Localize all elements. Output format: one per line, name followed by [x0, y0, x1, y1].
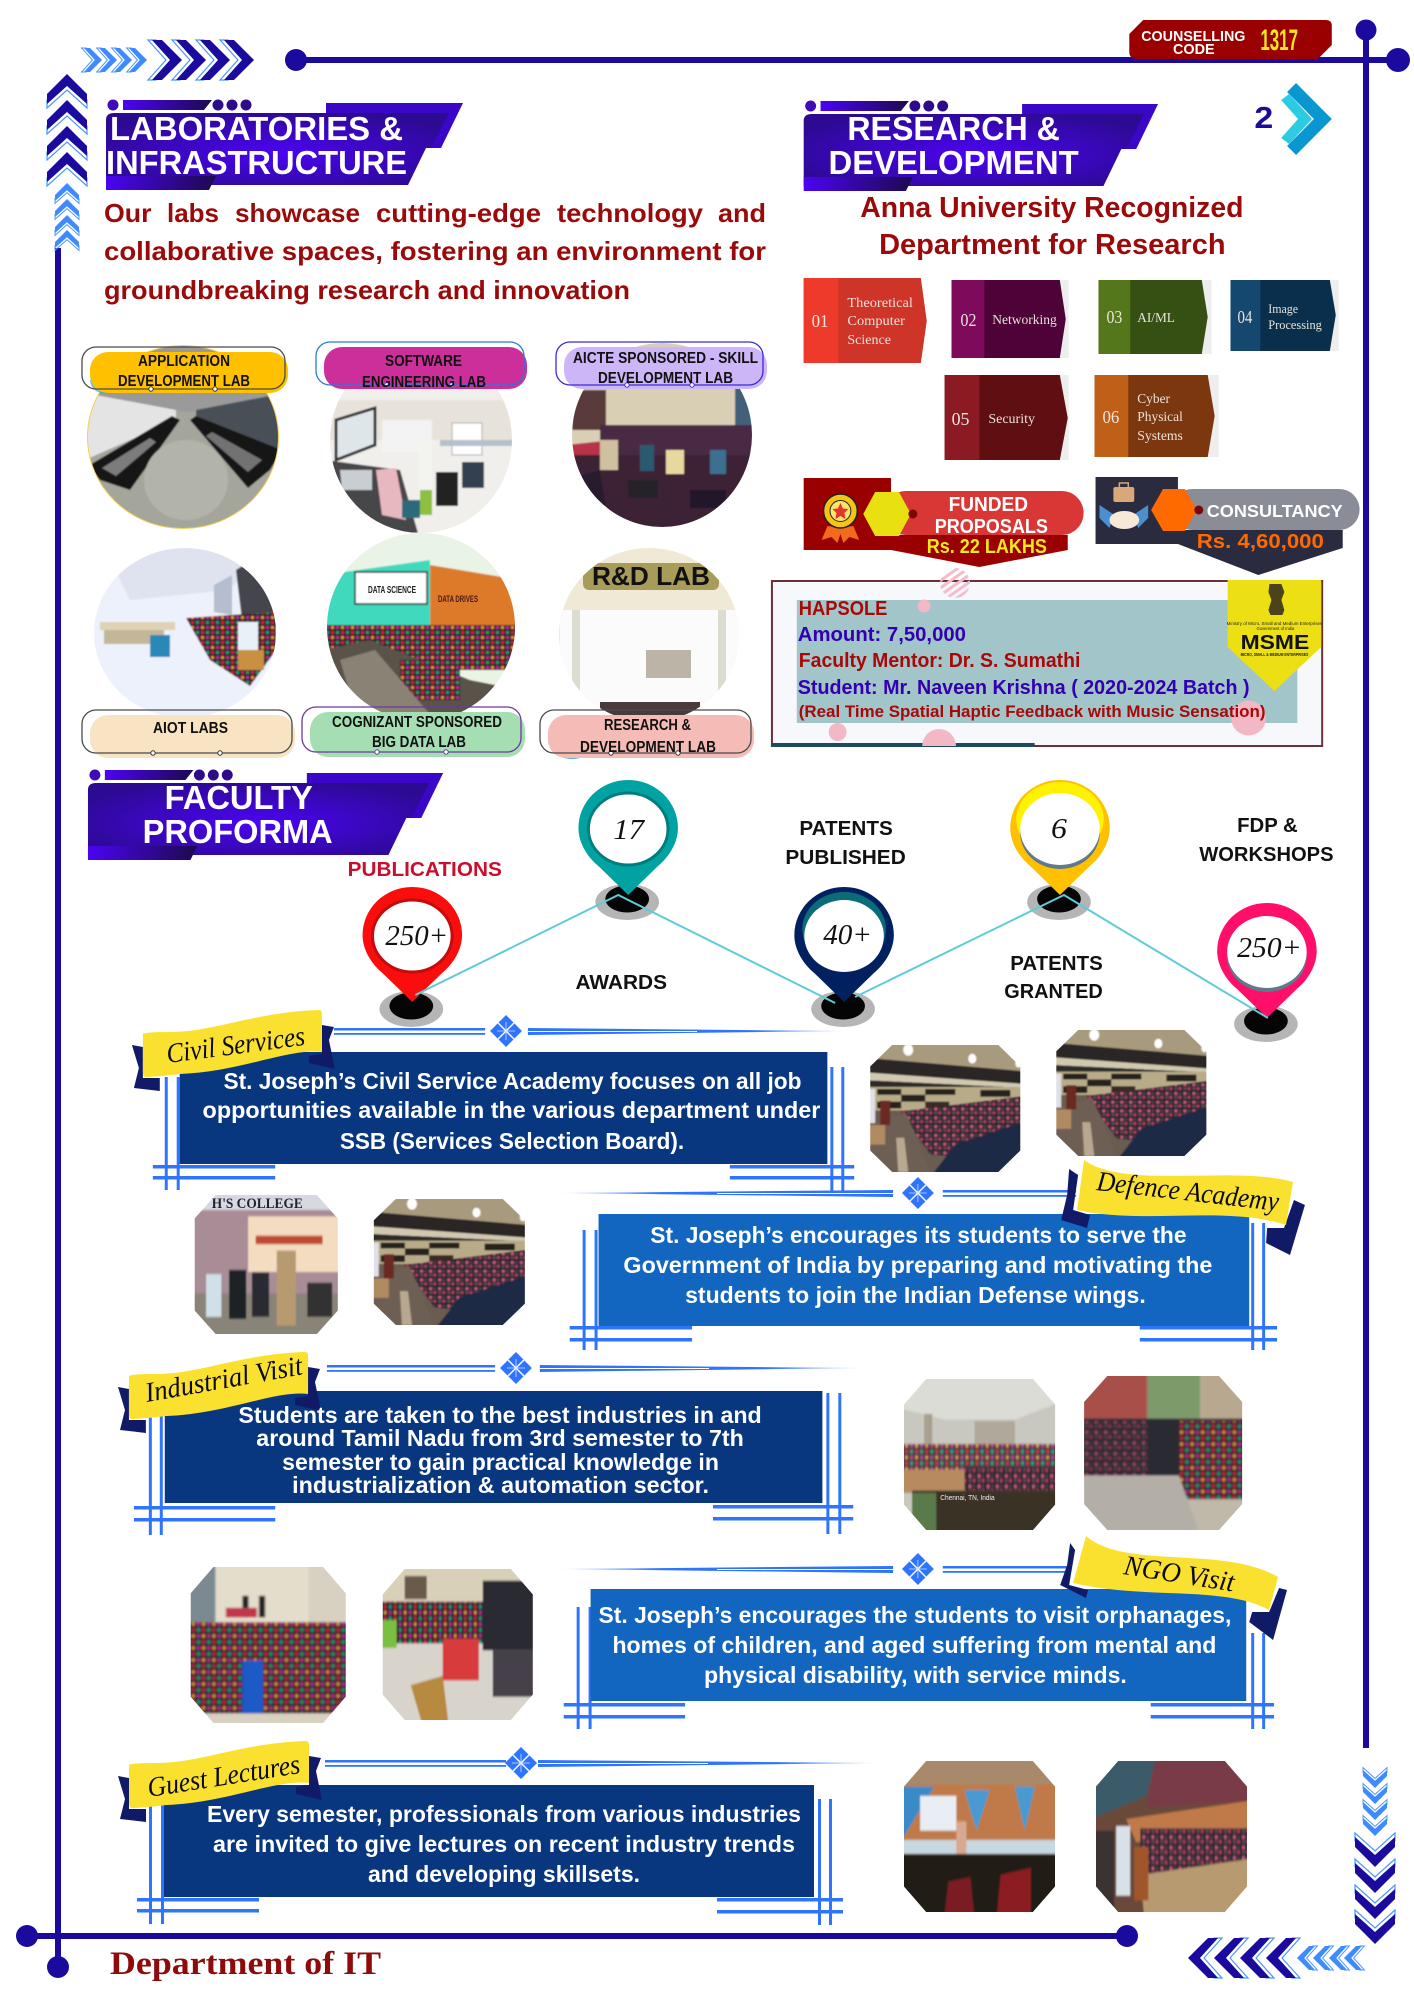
text block: labs intro: groundbreaking research and innovation [104, 275, 630, 305]
panel: civil services: St. Joseph’s Civil Service Academy focuses on all job [223, 1068, 802, 1094]
photo: guest lecture audience [1096, 1761, 1247, 1912]
panel: industrial visit: around Tamil Nadu from 3rd semester to 7th [256, 1425, 744, 1451]
panel: ngo visit: homes of children, and aged suffering from mental and [612, 1632, 1216, 1658]
label: application development lab [82, 347, 288, 394]
research area 03 [1099, 280, 1212, 354]
heading: anna university recognized: Department for Research [879, 229, 1226, 261]
pin: patents published: PATENTS [799, 818, 893, 840]
research area 03: AI/ML [1137, 311, 1175, 326]
research area 05: Security [988, 412, 1035, 427]
heading: research and development [804, 100, 1158, 191]
label: cognizant big data lab [302, 707, 525, 757]
panel: hapsole project: Amount: 7,50,000 [798, 624, 966, 646]
heading: faculty proforma: FACULTY [165, 779, 313, 816]
label: cognizant big data lab: COGNIZANT SPONSORED [332, 714, 502, 731]
counselling code badge: COUNSELLING [1141, 28, 1245, 45]
panel: guest lectures: Guest Lectures [145, 1749, 302, 1804]
text block: labs intro: labs [167, 198, 219, 228]
heading: laboratories and infrastructure [106, 100, 463, 190]
text block: labs intro [104, 198, 766, 305]
research area 02: 02 [961, 310, 976, 330]
research area 03: 03 [1106, 307, 1122, 327]
label: aicte skill development lab: DEVELOPMENT LAB [598, 370, 733, 387]
text block: labs intro: Our [104, 198, 152, 228]
photo: industrial group [1084, 1376, 1242, 1530]
pin: patents granted: PATENTS [1010, 953, 1103, 975]
panel: guest lectures: and developing skillsets. [368, 1861, 640, 1887]
pin: fdp and workshops: WORKSHOPS [1199, 844, 1334, 866]
heading: laboratories and infrastructure: INFRASTRUCTURE [106, 144, 407, 181]
chart: faculty metrics pins [348, 780, 1334, 1042]
panel: industrial visit: Industrial Visit [142, 1350, 306, 1409]
text block: labs intro: showcase [235, 198, 360, 228]
pin: patents published: PUBLISHED [785, 847, 906, 869]
pin: fdp and workshops: 250+ [1237, 933, 1302, 964]
photo: defence hall [374, 1199, 525, 1325]
counselling code badge [1129, 20, 1332, 59]
panel: guest lectures: are invited to give lectures on recent industry trends [213, 1831, 795, 1857]
photo: industrial seminar room [904, 1379, 1056, 1530]
text block: labs intro: cutting-edge [376, 198, 541, 228]
text block: labs intro: technology [557, 198, 704, 228]
callout: funded proposals [804, 478, 1084, 567]
pin: patents granted: 6 [1051, 814, 1067, 845]
panel: ngo visit [560, 1536, 1287, 1729]
text block: labs intro: collaborative spaces, fostering an environment for [104, 236, 766, 266]
research area 06: Physical [1137, 410, 1183, 425]
panel: guest lectures [118, 1741, 879, 1925]
pin: publications: 250+ [385, 921, 448, 952]
photo: cognizant lab: DATA DRIVES [438, 594, 478, 604]
callout: consultancy: Rs. 4,60,000 [1197, 531, 1324, 553]
panel: defence academy: students to join the Indian Defense wings. [685, 1282, 1146, 1308]
pin: awards [575, 780, 678, 994]
panel: industrial visit: Students are taken to the best industries in and [238, 1402, 762, 1428]
icon: bottom chevrons [1188, 1938, 1364, 1978]
research area 04: 04 [1237, 307, 1252, 327]
research area 06: Systems [1137, 429, 1183, 444]
label: research and development lab: RESEARCH & [604, 717, 691, 734]
panel: ngo visit: NGO Visit [1121, 1550, 1238, 1599]
pin: patents published [785, 818, 906, 1027]
panel: defence academy: St. Joseph’s encourages its students to serve the [650, 1222, 1187, 1248]
badge: msme: Government of India [1257, 626, 1295, 631]
label: aicte skill development lab: AICTE SPONSORED - SKILL [573, 350, 758, 367]
counselling code badge: CODE [1173, 41, 1215, 58]
research area 04 [1231, 280, 1339, 351]
panel: civil services [132, 1010, 854, 1192]
research area 02: Networking [992, 313, 1057, 328]
icon: page number two [1254, 83, 1332, 155]
panel: defence academy [560, 1160, 1305, 1350]
research area 04: Image [1268, 301, 1298, 316]
pin: patents granted [1004, 780, 1110, 1003]
research area 01: 01 [812, 311, 828, 331]
panel: defence academy: Government of India by preparing and motivating the [623, 1252, 1212, 1278]
heading: anna university recognized [860, 192, 1243, 261]
pin: publications [348, 859, 502, 1027]
photo: ngo visit seating [382, 1569, 533, 1720]
label: application development lab: DEVELOPMENT LAB [118, 373, 250, 390]
pin: awards: 17 [613, 815, 645, 846]
panel: guest lectures: Every semester, professionals from various industries [207, 1801, 801, 1827]
icon: medal [822, 494, 859, 543]
label: aiot labs: AIOT LABS [153, 720, 228, 737]
research area 06 [1095, 375, 1219, 457]
label: aiot labs [82, 710, 295, 758]
photo: civil services hall two [1056, 1030, 1206, 1156]
photo: software engineering lab [330, 389, 512, 533]
heading: anna university recognized: Anna University Recognized [860, 192, 1243, 224]
label: software engineering lab: SOFTWARE [385, 353, 462, 370]
heading: research and development: RESEARCH & [847, 110, 1060, 147]
photo: defence event: H'S COLLEGE [212, 1195, 303, 1212]
label: aicte skill development lab [556, 342, 767, 389]
label: research and development lab: DEVELOPMENT LAB [580, 739, 716, 756]
photo: defence event [194, 1195, 338, 1334]
research area 01 [804, 278, 927, 363]
photo: aiot labs [94, 548, 276, 715]
panel: civil services: SSB (Services Selection Board). [340, 1128, 684, 1154]
panel: hapsole project: HAPSOLE [799, 598, 887, 620]
heading: laboratories and infrastructure: LABORATORIES & [110, 110, 403, 147]
label: cognizant big data lab: BIG DATA LAB [372, 734, 466, 751]
pin: fdp and workshops [1199, 815, 1334, 1042]
heading: faculty proforma [88, 770, 443, 860]
photo: guest lecture speaker [904, 1761, 1055, 1912]
callout: funded proposals: PROPOSALS [935, 516, 1048, 538]
photo: cognizant lab [327, 533, 515, 712]
icon: right column chevrons [1355, 1768, 1395, 1944]
research area 06: 06 [1102, 407, 1119, 427]
callout: funded proposals: FUNDED [949, 494, 1028, 516]
footer: department of it: Department of IT [110, 1946, 381, 1982]
panel: civil services: Civil Services [165, 1021, 307, 1070]
research area 05 [945, 375, 1069, 460]
callout: consultancy: CONSULTANCY [1207, 501, 1343, 521]
badge: msme: MSME [1241, 632, 1309, 654]
research area 01: Computer [847, 314, 905, 329]
panel: hapsole project: Student: Mr. Naveen Krishna ( 2020-2024 Batch ) [798, 677, 1250, 699]
photo: research and development lab [556, 546, 742, 724]
heading: research and development: DEVELOPMENT [828, 144, 1079, 181]
panel: ngo visit: physical disability, with service minds. [704, 1662, 1127, 1688]
label: software engineering lab: ENGINEERING LAB [362, 374, 486, 391]
research area 01: Theoretical [847, 296, 913, 311]
label: application development lab: APPLICATION [138, 353, 230, 370]
photo: research and development lab: R&D LAB [592, 561, 710, 591]
photo: industrial seminar room: Chennai, TN, India [940, 1494, 995, 1502]
panel: hapsole project: Faculty Mentor: Dr. S. Sumathi [799, 650, 1080, 672]
pin: fdp and workshops: FDP & [1237, 815, 1298, 837]
panel: industrial visit: semester to gain practical knowledge in [282, 1449, 719, 1475]
panel: civil services: opportunities available in the various department under [203, 1097, 820, 1123]
panel: ngo visit: St. Joseph’s encourages the students to visit orphanages, [599, 1602, 1231, 1628]
research area 02 [952, 280, 1069, 358]
pin: awards: AWARDS [575, 972, 667, 994]
photo: aicte lab [572, 343, 752, 527]
label: research and development lab [540, 710, 754, 759]
badge: msme: MICRO, SMALL & MEDIUM ENTERPRISES [1241, 652, 1309, 658]
callout: consultancy [1096, 477, 1360, 575]
badge: msme: Ministry of Micro, Small and Medium Enterprises [1227, 621, 1323, 627]
research area 01: Science [847, 333, 891, 348]
panel: hapsole project: (Real Time Spatial Haptic Feedback with Music Sensation) [799, 702, 1265, 721]
photo: civil services hall one [870, 1045, 1020, 1172]
panel: hapsole project [772, 568, 1323, 747]
heading: faculty proforma: PROFORMA [143, 813, 333, 850]
research area 06: Cyber [1137, 392, 1170, 407]
pin: patents granted: GRANTED [1004, 981, 1103, 1003]
panel: defence academy: Defence Academy [1094, 1166, 1281, 1218]
pin: publications: PUBLICATIONS [348, 859, 502, 881]
photo: cognizant lab: DATA SCIENCE [368, 585, 416, 596]
panel: industrial visit [118, 1350, 862, 1535]
text block: labs intro: and [718, 198, 766, 228]
icon: page number two: 2 [1254, 100, 1273, 135]
icon: handshake [1100, 483, 1148, 529]
badge: msme [1227, 580, 1323, 691]
research area 05: 05 [952, 409, 970, 429]
photo: application development lab [87, 345, 279, 529]
pin: patents published: 40+ [823, 920, 872, 951]
photo: ngo group [190, 1567, 346, 1723]
icon: left column chevrons [47, 74, 87, 250]
counselling code badge: 1317 [1260, 24, 1298, 57]
panel: industrial visit: industrialization & automation sector. [292, 1472, 709, 1498]
icon: top chevrons [82, 40, 254, 80]
research area 04: Processing [1268, 317, 1322, 332]
callout: funded proposals: Rs. 22 LAKHS [927, 536, 1047, 558]
label: software engineering lab [316, 342, 527, 391]
